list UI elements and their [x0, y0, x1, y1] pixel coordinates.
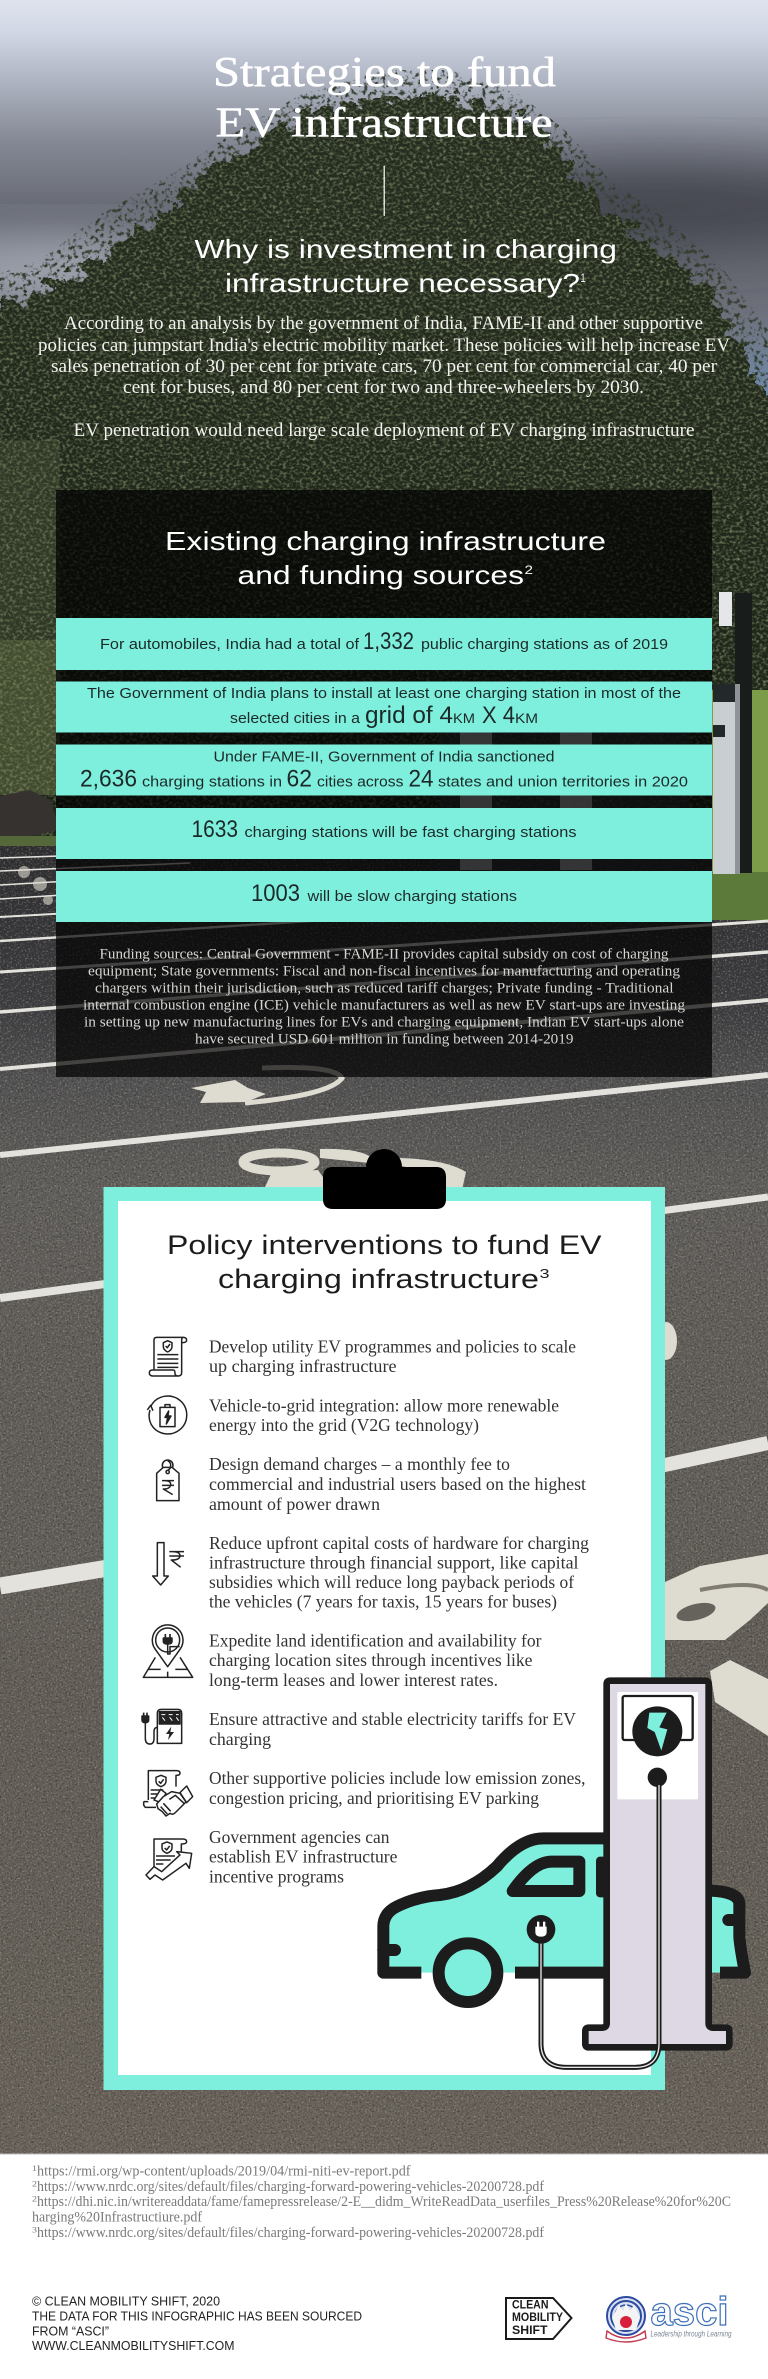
icon: charging location pin: [143, 1625, 193, 1677]
item: demand charges: [157, 1454, 586, 1514]
text: [209, 1768, 586, 1808]
panel heading: 2: [524, 563, 533, 577]
stat bar: FAME-II sanction: 24: [408, 766, 434, 792]
panel: policy interventions clipboard: [104, 1149, 665, 2090]
stat bar: grid plan: The Government of India plans to install at least one charging station in most of the: [87, 685, 681, 702]
panel background: [56, 490, 712, 1077]
source notes: [32, 2164, 731, 2241]
source notes: 2: [32, 2194, 37, 2204]
title: Strategies to fund: [213, 50, 556, 96]
icon: policy document: [149, 1337, 187, 1376]
heading: why investment: [194, 234, 617, 298]
copyright: WWW.CLEANMOBILITYSHIFT.COM: [32, 2339, 234, 2353]
intro text: policies can jumpstart India's electric mobility market. These policies will help increase EV: [38, 336, 731, 356]
policy heading: Policy interventions to fund EV: [167, 1230, 602, 1260]
stat bar: grid plan: [56, 682, 712, 732]
text: commercial and industrial users based on the highest: [209, 1474, 586, 1494]
footer: [0, 2154, 768, 2379]
text: congestion pricing, and prioritising EV parking: [209, 1788, 539, 1808]
text: Design demand charges – a monthly fee to: [209, 1454, 510, 1474]
funding sources text: [83, 946, 686, 1048]
intro text: According to an analysis by the government of India, FAME-II and other supportive: [64, 314, 703, 334]
copyright: [32, 2294, 362, 2353]
text: [209, 1454, 586, 1514]
heading: why investment: Why is investment in charging: [194, 234, 617, 264]
text: charging: [209, 1729, 271, 1749]
stat bar: FAME-II sanction: states and union territories in 2020: [438, 774, 688, 790]
stat bar: FAME-II sanction: cities across: [317, 774, 404, 790]
icon: rupee tag: [157, 1460, 179, 1501]
policy heading: charging infrastructure: [218, 1264, 539, 1294]
item: government incentive programs: [146, 1827, 398, 1886]
icon: document growth arrow: [146, 1839, 192, 1880]
text: subsidies which will reduce long payback periods of: [209, 1572, 574, 1592]
icon: charging pump: [142, 1709, 182, 1744]
text: Expedite land identification and availability for: [209, 1630, 542, 1650]
text: [209, 1533, 589, 1612]
stat bar: slow charging: will be slow charging stations: [306, 888, 517, 905]
stat bar: fast charging: [56, 808, 712, 859]
road surface: [0, 846, 768, 2154]
heading: why investment: 1: [580, 271, 586, 285]
grass right: [712, 690, 768, 872]
car: [383, 1838, 745, 2002]
source notes: harging%20Infrastructiure.pdf: [32, 2210, 202, 2226]
text: [209, 1336, 576, 1376]
text: Vehicle-to-grid integration: allow more renewable: [209, 1396, 559, 1416]
divider line: [384, 166, 385, 216]
logo: clean mobility shift: SHIFT: [512, 2325, 548, 2337]
illustration: electric car plugged into charger: [383, 1681, 745, 2067]
clipboard clip: [323, 1149, 446, 1209]
text: amount of power drawn: [209, 1494, 380, 1514]
title: EV infrastructure: [216, 100, 552, 146]
stat bar: fast charging: 1633: [192, 816, 238, 843]
item: land identification: [143, 1625, 542, 1690]
source notes: 2: [32, 2180, 37, 2188]
copyright: © CLEAN MOBILITY SHIFT, 2020: [32, 2294, 220, 2308]
road markings: [18, 866, 768, 1736]
item: supportive policies: [144, 1768, 586, 1816]
panel heading: Existing charging infrastructure: [165, 526, 606, 556]
text: Other supportive policies include low emission zones,: [209, 1768, 586, 1788]
item: electricity tariffs: [142, 1709, 576, 1749]
panel: existing charging infrastructure: [56, 490, 712, 1077]
text: long-term leases and lower interest rates.: [209, 1670, 498, 1690]
source notes: 3: [32, 2226, 37, 2234]
stat bar: public charging stations: public charging stations as of 2019: [421, 636, 668, 653]
stat bar: FAME-II sanction: charging stations in: [142, 774, 282, 790]
funding sources text: Funding sources: Central Government - FAME-II provides capital subsidy on cost of charging: [100, 946, 669, 962]
heading: why investment: infrastructure necessary?: [225, 268, 580, 298]
icon: down arrow rupee: [153, 1543, 184, 1585]
text: the vehicles (7 years for taxis, 15 years for buses): [209, 1592, 557, 1612]
policy heading: [167, 1230, 602, 1294]
stat bar: grid plan: grid of 4: [365, 702, 453, 729]
stat bar: grid plan: KM: [515, 710, 538, 726]
charging post photo: [735, 593, 752, 873]
panel heading: [165, 526, 606, 590]
text: Ensure attractive and stable electricity tariffs for EV: [209, 1709, 576, 1729]
text: Reduce upfront capital costs of hardware for charging: [209, 1533, 589, 1553]
item: vehicle-to-grid: [147, 1396, 559, 1435]
panel heading: and funding sources: [238, 560, 524, 590]
stat bar: slow charging: 1003: [251, 880, 300, 907]
logo: clean mobility shift: CLEAN: [512, 2300, 548, 2312]
source notes: https://dhi.nic.in/writereaddata/fame/famepressrelease/2-E__didm_WriteReadData_userfiles_Press%20Release%20for%20C: [37, 2194, 731, 2210]
text: Government agencies can: [209, 1827, 390, 1847]
stat bar: FAME-II sanction: 2,636: [80, 766, 137, 792]
funding sources text: chargers within their jurisdiction, such as reduced tariff charges; Private funding - Traditional: [95, 980, 674, 996]
intro text: sales penetration of 30 per cent for private cars, 70 per cent for commercial car, 40 per: [51, 357, 717, 377]
plug: [527, 1915, 555, 1944]
funding sources text: internal combustion engine (ICE) vehicle manufacturers as well as new EV start-ups are investing: [83, 998, 686, 1014]
funding sources text: have secured USD 601 million in funding between 2014-2019: [195, 1032, 574, 1048]
stat bar: grid plan: KM: [453, 710, 475, 726]
left vegetation: [0, 640, 60, 795]
road lines: [0, 852, 768, 1586]
icon: document handshake: [144, 1771, 193, 1816]
stat bar: public charging stations: For automobiles, India had a total of: [100, 636, 360, 653]
text: incentive programs: [209, 1866, 344, 1886]
rocks: [0, 790, 56, 836]
stat bar: FAME-II sanction: Under FAME-II, Government of India sanctioned: [214, 748, 554, 766]
stat bar: slow charging: [56, 871, 712, 922]
text: Develop utility EV programmes and policies to scale: [209, 1336, 576, 1356]
intro text: cent for buses, and 80 per cent for two and three-wheelers by 2030.: [123, 378, 644, 398]
logo: asci: asci: [650, 2290, 728, 2334]
text: [209, 1827, 398, 1886]
title: [213, 50, 556, 146]
item: utility programmes: [149, 1336, 576, 1376]
stat bar: grid plan: X 4: [482, 702, 515, 729]
stat bar: grid plan: selected cities in a: [230, 710, 361, 727]
copyright: FROM “ASCI”: [32, 2324, 109, 2338]
source notes: 1: [32, 2164, 37, 2173]
policy heading: 3: [540, 1267, 550, 1281]
intro text: [38, 314, 731, 441]
chargers behind panel: [444, 733, 690, 870]
item: reduce capital costs: [153, 1533, 589, 1612]
funding sources text: equipment; State governments: Fiscal and non-fiscal incentives for manufacturing and operating: [88, 964, 681, 980]
charger post: [585, 1681, 729, 2047]
icon: battery cycle: [147, 1396, 187, 1434]
copyright: THE DATA FOR THIS INFOGRAPHIC HAS BEEN SOURCED: [32, 2310, 362, 2324]
funding sources text: in setting up new manufacturing lines for EVs and charging equipment, Indian EV start-ups alone: [84, 1014, 684, 1030]
text: up charging infrastructure: [209, 1356, 397, 1376]
text: establish EV infrastructure: [209, 1846, 398, 1866]
source notes: https://rmi.org/wp-content/uploads/2019/04/rmi-niti-ev-report.pdf: [37, 2164, 411, 2180]
text: [209, 1630, 542, 1690]
text: infrastructure through financial support, like capital: [209, 1552, 579, 1572]
stat bar: public charging stations: [56, 618, 712, 670]
stat bar: FAME-II sanction: 62: [286, 766, 312, 792]
text: [209, 1396, 559, 1435]
clipboard frame: [104, 1187, 665, 2090]
logo: asci: Leadership through Learning: [650, 2328, 732, 2338]
intro text: EV penetration would need large scale deployment of EV charging infrastructure: [74, 421, 694, 441]
logo: asci: [606, 2290, 732, 2342]
text: [209, 1709, 576, 1749]
source notes: https://www.nrdc.org/sites/default/files/charging-forward-powering-vehicles-20200728.pdf: [37, 2225, 544, 2241]
text: charging location sites through incentives like: [209, 1650, 533, 1670]
stat bar: public charging stations: 1,332: [363, 628, 414, 655]
stat bar: FAME-II sanction: [56, 744, 712, 796]
source notes: https://www.nrdc.org/sites/default/files/charging-forward-powering-vehicles-20200728.pdf: [37, 2179, 544, 2195]
charging cable: [541, 1780, 659, 2067]
text: energy into the grid (V2G technology): [209, 1415, 479, 1435]
stat bar: fast charging: charging stations will be fast charging stations: [244, 824, 576, 841]
logo: clean mobility shift: [506, 2298, 572, 2339]
logo: clean mobility shift: MOBILITY: [512, 2312, 563, 2324]
